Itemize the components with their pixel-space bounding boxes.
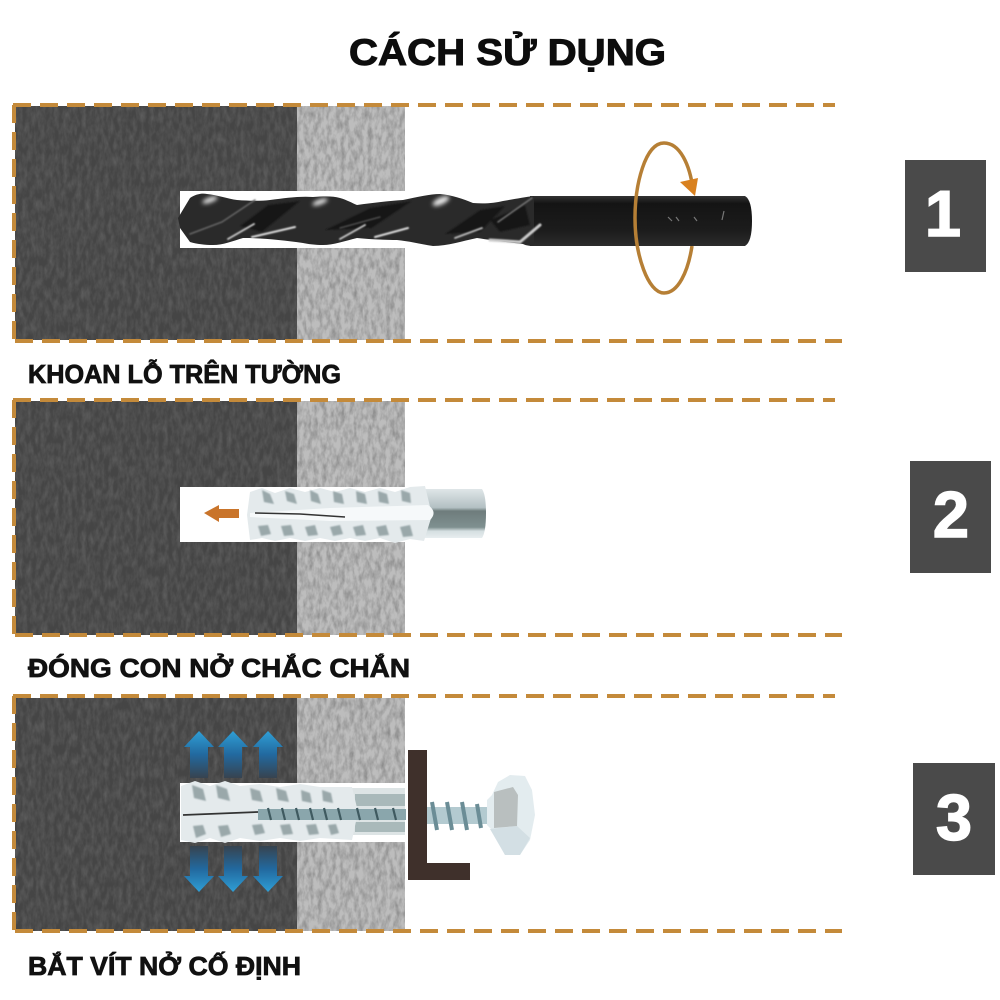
anchor collar bbox=[350, 788, 405, 835]
drill flutes bbox=[178, 194, 534, 246]
icon: drill bit bbox=[178, 194, 752, 246]
icon: expansion anchor bbox=[247, 486, 486, 543]
anchor ribs bbox=[192, 785, 339, 838]
icon: hex bolt head bbox=[487, 775, 535, 855]
thread marks bbox=[432, 802, 481, 830]
step number 3: 3 bbox=[936, 781, 972, 854]
drilled hole bbox=[180, 191, 405, 248]
wall: dark concrete layer bbox=[15, 401, 297, 635]
anchor collar bbox=[425, 489, 486, 538]
wall: light plaster layer bbox=[297, 106, 405, 340]
drill edge lines bbox=[190, 198, 540, 242]
drilled hole bbox=[180, 783, 405, 842]
dashed outline bbox=[13, 400, 842, 635]
icon: anchor with screw inside bbox=[181, 781, 406, 843]
head lower facet bbox=[490, 826, 530, 855]
dashed outline bbox=[13, 696, 842, 931]
anchor body bbox=[247, 486, 432, 543]
slit bbox=[183, 812, 258, 815]
anchor ribs bbox=[258, 490, 413, 537]
icon: upward expansion arrows bbox=[184, 731, 283, 778]
drill shank markings bbox=[668, 211, 724, 221]
icon: push arrow bbox=[204, 505, 239, 522]
drill flute shading bbox=[240, 201, 530, 234]
panel: step 2 insert anchor bbox=[13, 400, 842, 635]
wall: dark concrete layer bbox=[15, 698, 297, 931]
wall: dark concrete layer bbox=[15, 106, 297, 340]
dashed outline bbox=[13, 105, 842, 341]
head outer bbox=[487, 775, 535, 855]
step 3 label: BẮT VÍT NỞ CỐ ĐỊNH bbox=[28, 950, 301, 981]
step 1 label: KHOAN LỖ TRÊN TƯỜNG bbox=[28, 359, 341, 389]
screw shaft in anchor bbox=[258, 809, 406, 820]
anchor body bbox=[181, 781, 358, 843]
icon: screw thread bbox=[427, 802, 492, 830]
step number 1 bbox=[905, 160, 986, 272]
step number 1: 1 bbox=[925, 177, 961, 250]
step 2 label: ĐÓNG CON NỞ CHẮC CHẮN bbox=[28, 652, 410, 683]
anchor collar shading bbox=[355, 794, 405, 832]
shaft bbox=[427, 807, 492, 824]
icon: rotation arrow back arc bbox=[664, 143, 693, 293]
wall: light plaster layer bbox=[297, 698, 405, 931]
step number 2: 2 bbox=[933, 478, 969, 551]
icon: L bracket bbox=[408, 750, 470, 880]
head face bbox=[494, 787, 518, 828]
panel: step 3 fix screw bbox=[13, 696, 842, 931]
wall: light plaster layer bbox=[297, 401, 405, 635]
anchor slit shadow bbox=[255, 513, 345, 517]
step number 2 bbox=[910, 461, 991, 573]
drill shank bbox=[530, 196, 752, 246]
drill highlights bbox=[202, 194, 451, 208]
icon: rotation arrow front arc bbox=[635, 143, 664, 293]
screw threads bbox=[268, 808, 396, 820]
panel: step 1 drill hole bbox=[13, 105, 842, 341]
anchor slit bbox=[250, 505, 434, 521]
icon: downward expansion arrows bbox=[184, 846, 283, 892]
step number 3 bbox=[913, 763, 995, 875]
title: CÁCH SỬ DỤNG bbox=[349, 31, 666, 73]
icon: rotation arrowhead bbox=[680, 178, 698, 196]
drilled hole bbox=[180, 487, 405, 542]
